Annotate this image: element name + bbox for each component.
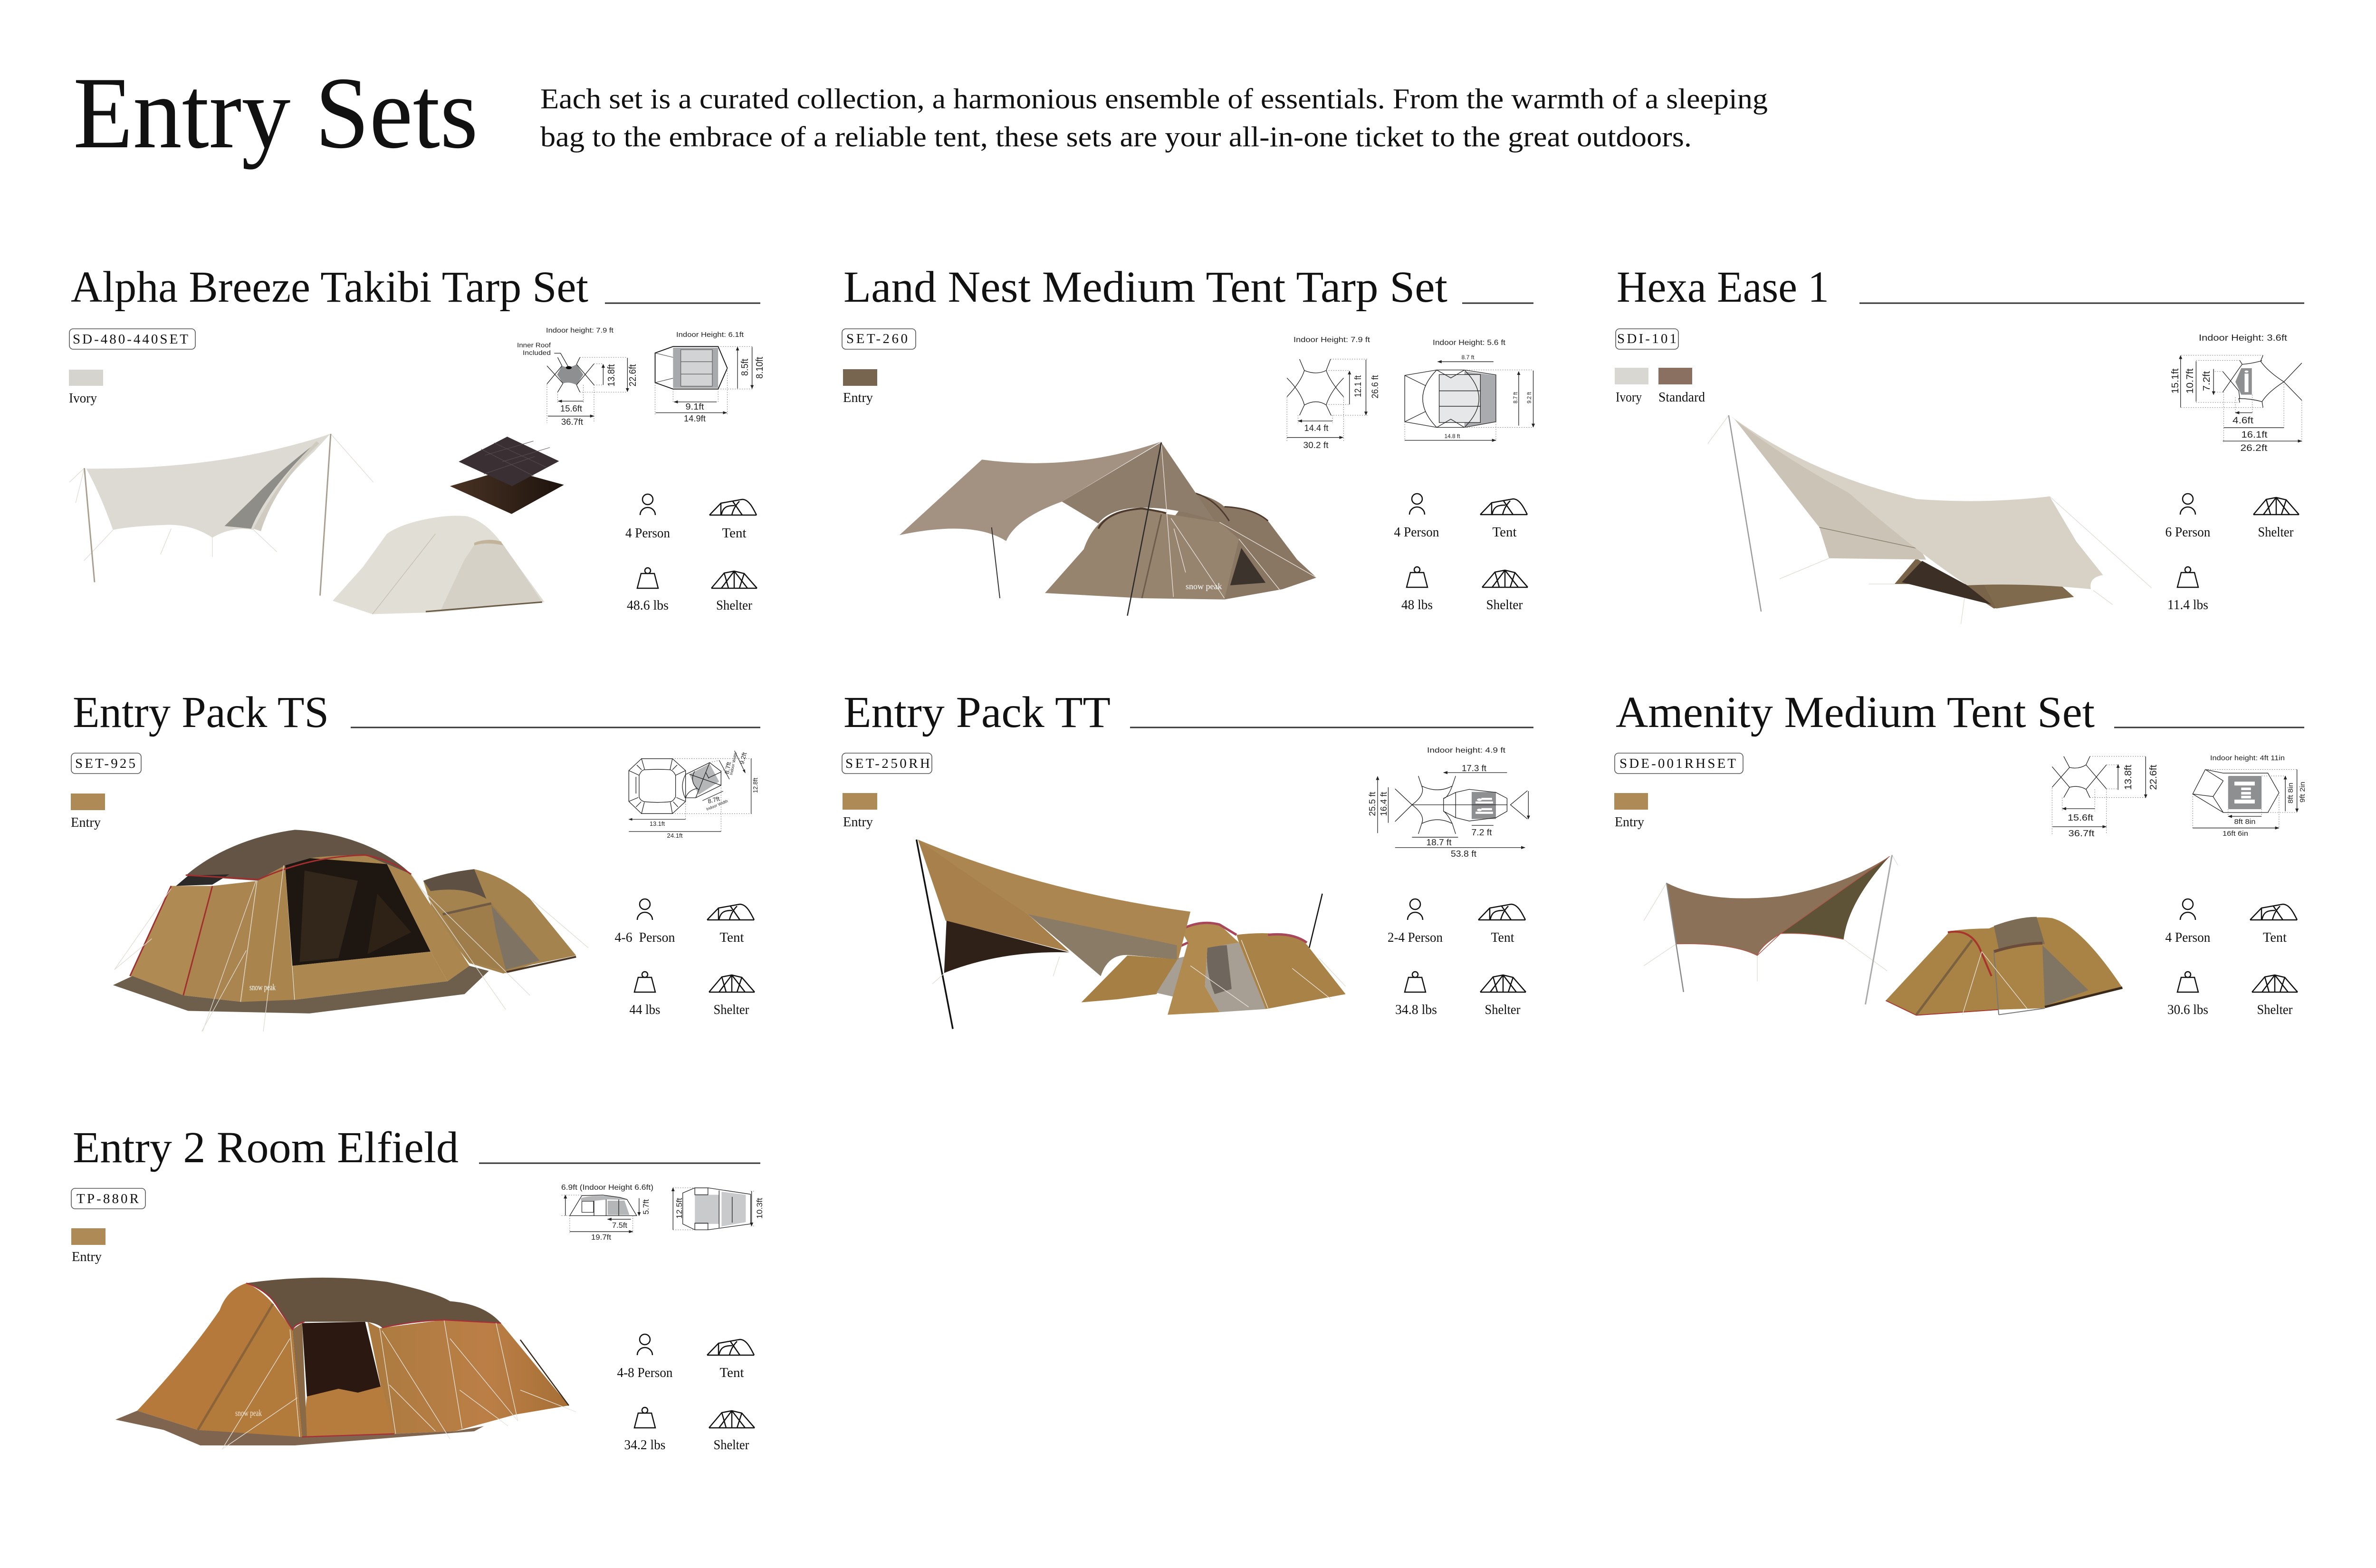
model badge: SDI-101 (1617, 331, 1677, 346)
tent dimensions diagram: Indoor Width (728, 752, 738, 775)
icon: weight (627, 568, 669, 613)
shelter dimensions diagram: 26.2ft (2240, 443, 2268, 453)
icon: capacity: 4-6 Person (615, 930, 675, 945)
icon: weight (1401, 567, 1433, 612)
shelter dimensions diagram (2170, 333, 2302, 453)
icon: capacity: 4-8 Person (617, 1365, 673, 1380)
model badge: SET-250RH (845, 756, 930, 771)
icon: shelter: Shelter (1485, 1002, 1521, 1017)
tent dimensions diagram (2193, 754, 2307, 838)
intro text: bag to the embrace of a reliable tent, these sets are your all-in-one ticket to the great outdoors. (540, 121, 1692, 153)
icon: weight (624, 1407, 665, 1453)
panel: Land Nest Medium Tent Tarp Set (842, 263, 1533, 616)
model badge (71, 1188, 145, 1209)
icon: shelter: Shelter (714, 1002, 749, 1017)
tent side dimensions diagram: 7.5ft (612, 1222, 628, 1230)
panel: Land Nest Medium Tent Tarp Set: snow peak (1186, 582, 1222, 591)
tent side dimensions diagram: 5.7ft (642, 1199, 651, 1214)
model badge: SDE-001RHSET (1619, 756, 1736, 771)
model badge (1615, 753, 1743, 774)
model badge: SET-260 (846, 331, 908, 346)
icon: weight (1395, 972, 1437, 1017)
tent dimensions diagram: 14.9ft (684, 414, 706, 423)
tent top dimensions diagram (673, 1188, 764, 1230)
panel: Entry 2 Room Elfield: snow peak (235, 1408, 262, 1418)
tent dimensions diagram: Indoor Width (706, 798, 728, 812)
tarp dimensions diagram (517, 326, 638, 427)
tarp dimensions diagram: Inner Roof (517, 341, 551, 349)
tent side dimensions diagram: 6.9ft (Indoor Height 6.6ft) (561, 1184, 653, 1192)
panel: Entry Pack TS: snow peak (249, 983, 276, 993)
tarp dimensions diagram: 13.8ft (2123, 765, 2134, 790)
shelter dimensions diagram: 10.7ft (2185, 368, 2195, 393)
colour swatch: Ivory: Ivory (69, 391, 97, 406)
icon: capacity (2165, 494, 2211, 540)
icon: shelter (1482, 570, 1528, 612)
tarp dimensions diagram: Indoor height: 7.9 ft (546, 326, 614, 335)
colour swatch: Ivory (69, 370, 103, 406)
icon: shelter: Shelter (1486, 597, 1523, 612)
colour swatch: Entry (843, 793, 877, 830)
shelter dimensions diagram: 4.6ft (2232, 416, 2254, 426)
tent dimensions diagram: 8.7 ft (1512, 392, 1519, 403)
model badge: TP-880R (77, 1191, 139, 1206)
heading: Amenity Medium Tent Set (1616, 688, 2095, 737)
tarp dimensions diagram: 36.7ft (2068, 829, 2095, 838)
tent dimensions diagram: 9.1ft (685, 402, 704, 411)
shelter dimensions diagram: 16.1ft (2241, 430, 2268, 440)
tarp and tent dimensions diagram: 17.3 ft (1462, 764, 1486, 773)
icon: shelter: Shelter (2258, 525, 2294, 540)
tent dimensions diagram: 8.5ft (740, 359, 750, 376)
shelter dimensions diagram: 7.2ft (2202, 371, 2212, 391)
tarp dimensions diagram: 12.1 ft (1353, 375, 1363, 397)
tarp dimensions diagram: 30.2 ft (1303, 440, 1329, 450)
tarp dimensions diagram: 26.6 ft (1370, 375, 1380, 398)
icon: tent: Tent (722, 526, 746, 541)
icon: tent: Tent (719, 930, 744, 945)
tarp and tent dimensions diagram: Indoor height: 4.9 ft (1427, 746, 1506, 755)
model badge (842, 329, 916, 349)
tarp and tent dimensions diagram: 18.7 ft (1427, 838, 1451, 847)
tent dimensions diagram (655, 331, 765, 423)
icon: capacity: 4 Person (625, 526, 670, 541)
tarp dimensions diagram: 36.7ft (561, 417, 583, 427)
tent dimensions diagram: 12.8ft (752, 778, 759, 793)
icon: capacity: 6 Person (2165, 525, 2211, 540)
intro text: Each set is a curated collection, a harmonious ensemble of essentials. From the warmth of a sleeping (540, 83, 1768, 115)
colour swatch: Entry (71, 794, 105, 830)
heading: Alpha Breeze Takibi Tarp Set (71, 263, 588, 312)
tent dimensions diagram: 8ft 8in (2287, 783, 2295, 803)
icon: capacity (1388, 899, 1443, 945)
model badge (69, 329, 195, 349)
heading: Entry 2 Room Elfield (73, 1123, 459, 1172)
heading: Land Nest Medium Tent Tarp Set (843, 263, 1447, 312)
tarp and tent dimensions diagram: 25.5 ft (1368, 792, 1377, 816)
model badge: SD-480-440SET (73, 332, 188, 347)
heading: Hexa Ease 1 (1617, 263, 1829, 312)
tarp and tent dimensions diagram: 53.8 ft (1451, 849, 1476, 859)
tent top dimensions diagram: 12.5ft (675, 1198, 684, 1219)
tent dimensions diagram: Indoor Height: 5.6 ft (1433, 339, 1506, 347)
panel: Alpha Breeze Takibi Tarp Set (69, 263, 765, 614)
icon: weight: 44 lbs (629, 1002, 661, 1017)
colour swatches: Ivory, Standard: Standard (1658, 390, 1705, 405)
tarp dimensions diagram (1287, 336, 1380, 450)
heading: Entry Pack TT (843, 688, 1111, 737)
colour swatch: Entry: Entry (72, 1250, 102, 1264)
icon: tent (709, 499, 757, 541)
colour swatch: Entry (1614, 793, 1648, 830)
tarp dimensions diagram: 14.4 ft (1304, 423, 1329, 433)
tarp and tent illustration (900, 441, 1316, 616)
tent dimensions diagram: Indoor Height: 6.1ft (676, 331, 744, 339)
icon: capacity (615, 899, 675, 945)
heading: Entry Pack TS (73, 688, 329, 737)
tarp dimensions diagram: Indoor Height: 7.9 ft (1293, 336, 1370, 344)
icon: capacity (625, 494, 670, 541)
icon: tent: Tent (1491, 930, 1514, 945)
tarp and tent illustration (917, 840, 1346, 1029)
tent illustration (115, 1278, 576, 1449)
panel: Entry Pack TS (71, 688, 760, 1032)
tent side dimensions diagram (561, 1184, 653, 1242)
colour swatch: Entry: Entry (843, 391, 873, 405)
icon: capacity: 2-4 Person (1388, 930, 1443, 945)
icon: shelter: Shelter (716, 598, 752, 613)
icon: tent (2250, 904, 2297, 945)
model badge: SET-925 (75, 756, 135, 771)
icon: capacity (1394, 494, 1439, 540)
shelter dimensions diagram: Indoor Height: 3.6ft (2199, 333, 2287, 343)
icon: tent (1478, 904, 1525, 945)
icon: weight: 34.8 lbs (1395, 1002, 1437, 1017)
icon: weight: 30.6 lbs (2167, 1002, 2208, 1017)
colour swatch: Entry: Entry (71, 815, 101, 830)
icon: shelter: Shelter (2257, 1002, 2293, 1017)
tent dimensions diagram: 8.7ft (723, 761, 732, 774)
icon: capacity: 4 Person (1394, 525, 1439, 540)
tarp and tent dimensions diagram: 7.2 ft (1471, 828, 1492, 837)
icon: shelter (1480, 975, 1526, 1017)
tarp and tent dimensions diagram (1368, 746, 1528, 859)
icon: capacity (617, 1334, 673, 1380)
icon: shelter (709, 1411, 755, 1453)
tarp and tent illustration (69, 434, 564, 614)
tent dimensions diagram: 8.7 ft (1462, 354, 1475, 361)
tent set illustration (113, 830, 588, 1032)
icon: shelter (709, 975, 755, 1017)
colour swatches: Ivory, Standard (1615, 368, 1705, 405)
tent dimensions diagram: 24.1ft (667, 832, 683, 839)
icon: weight (629, 972, 661, 1017)
icon: weight: 48 lbs (1401, 597, 1433, 612)
icon: shelter (2252, 975, 2298, 1017)
tarp and tent dimensions diagram: 16.4 ft (1379, 792, 1389, 816)
tent dimensions diagram: 9.2ft (738, 751, 748, 765)
colour swatch: Entry: Entry (843, 815, 873, 830)
icon: tent: Tent (1492, 525, 1517, 540)
tent dimensions diagram: 9ft 2in (2299, 782, 2307, 803)
icon: weight: 11.4 lbs (2167, 597, 2208, 612)
icon: weight: 34.2 lbs (624, 1437, 665, 1453)
tent dimensions diagram: 14.8 ft (1445, 433, 1460, 440)
colour swatch: Entry (71, 1228, 105, 1264)
icon: weight (2167, 567, 2208, 612)
tarp dimensions diagram: 22.6ft (628, 364, 638, 387)
icon: capacity: 4 Person (2165, 930, 2211, 945)
tent dimensions diagram (1405, 339, 1533, 441)
tarp and tent illustration (1644, 855, 2122, 1015)
tent dimensions diagram: Indoor height: 4ft 11in (2210, 754, 2285, 762)
colour swatch: Entry (843, 369, 877, 405)
icon: weight (2167, 972, 2208, 1017)
tarp dimensions diagram: 15.6ft (2068, 813, 2093, 822)
tarp dimensions diagram: 22.6ft (2148, 765, 2159, 790)
icon: tent (1480, 499, 1527, 540)
icon: tent (707, 1339, 754, 1380)
colour swatch: Entry: Entry (1615, 815, 1644, 830)
tarp dimensions diagram: Included (523, 349, 551, 356)
icon: tent: Tent (719, 1365, 744, 1380)
icon: shelter (2253, 497, 2299, 540)
tarp and tent illustration (1708, 415, 2152, 624)
model badge (71, 753, 141, 774)
icon: shelter (711, 571, 757, 613)
tarp dimensions diagram (2052, 756, 2159, 838)
title: Entry Sets (73, 56, 478, 170)
intro text (540, 83, 1768, 153)
icon: tent: Tent (2263, 930, 2287, 945)
panel: Amenity Medium Tent Set (1614, 688, 2307, 1017)
panel: Hexa Ease 1 (1615, 263, 2304, 624)
icon: tent (707, 904, 754, 945)
tarp dimensions diagram: 15.6ft (560, 404, 582, 413)
shelter dimensions diagram: 15.1ft (2170, 368, 2181, 393)
tent dimensions diagram: 8.7ft (707, 795, 720, 805)
icon: weight: 48.6 lbs (627, 598, 669, 613)
panel: Entry Pack TT (842, 688, 1533, 1029)
tent dimensions diagram: 8.10ft (755, 357, 765, 379)
tarp dimensions diagram: 13.8ft (606, 364, 617, 387)
panel: Entry 2 Room Elfield (71, 1123, 764, 1453)
icon: shelter: Shelter (714, 1437, 749, 1453)
tent dimensions diagram: 13.1ft (650, 820, 665, 827)
colour swatches: Ivory, Standard: Ivory (1616, 390, 1642, 405)
icon: capacity (2165, 899, 2211, 945)
tent top dimensions diagram: 10.3ft (755, 1198, 764, 1219)
tent dimensions diagram: 9.2 ft (1526, 392, 1533, 403)
tent dimensions diagram: 8ft 8in (2234, 818, 2255, 826)
tent dimensions diagram: 16ft 6in (2223, 830, 2248, 838)
tent dimensions diagram (629, 751, 759, 839)
tent side dimensions diagram: 19.7ft (591, 1233, 612, 1242)
